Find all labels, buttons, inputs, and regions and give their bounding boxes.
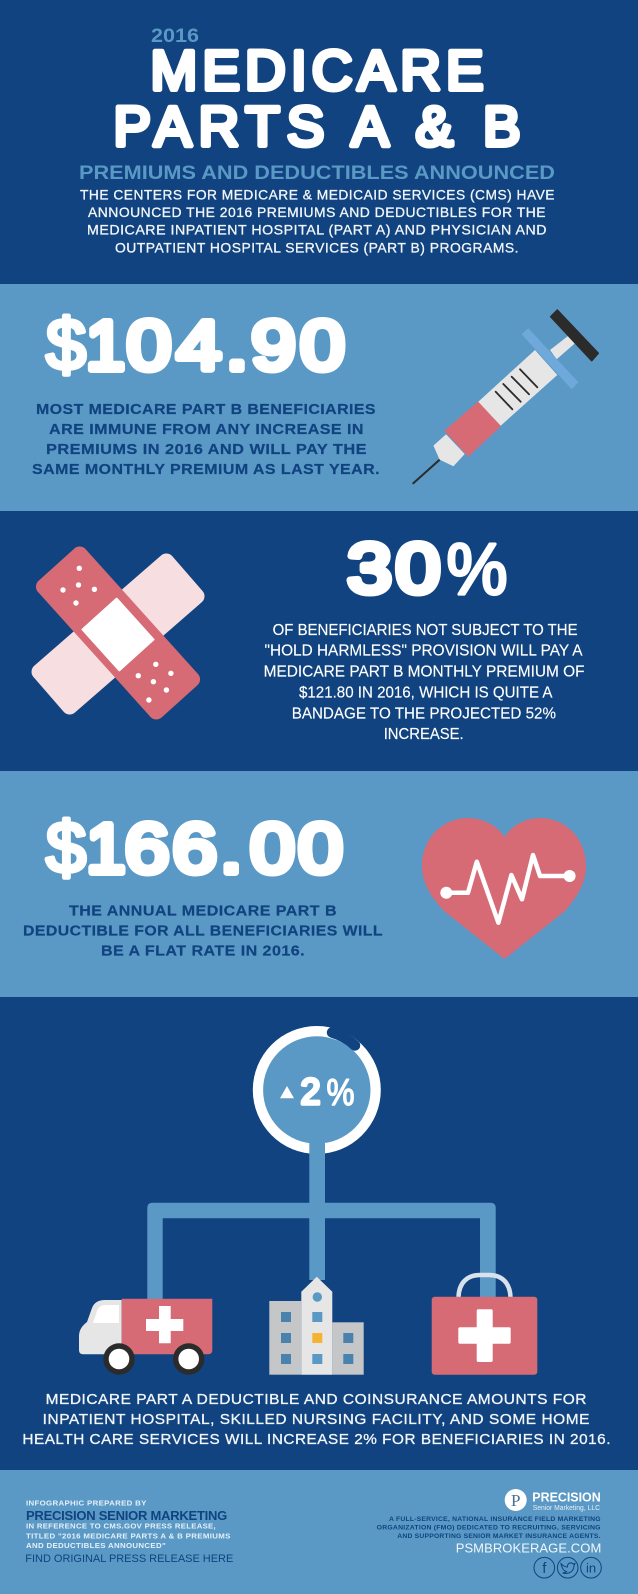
icon: syringe xyxy=(413,310,598,483)
thirty percent description: BANDAGE TO THE PROJECTED 52% xyxy=(292,705,556,722)
part A description xyxy=(22,1392,611,1448)
panel: header xyxy=(0,0,638,284)
part A description: INPATIENT HOSPITAL, SKILLED NURSING FACILITY, AND SOME HOME xyxy=(43,1412,590,1428)
stat: 30%: % xyxy=(446,530,508,610)
credits xyxy=(25,1499,233,1565)
intro text xyxy=(80,186,555,256)
stat: 2% xyxy=(300,1071,354,1113)
credits: FIND ORIGINAL PRESS RELEASE HERE xyxy=(25,1553,233,1565)
icon: heart with pulse xyxy=(422,818,586,959)
social icons xyxy=(534,1557,601,1578)
stat: $166.00: 1 xyxy=(86,810,125,888)
year label: 2016 xyxy=(151,26,199,47)
premium description xyxy=(32,402,380,478)
deductible description: THE ANNUAL MEDICARE PART B xyxy=(69,904,337,920)
logo: P xyxy=(511,1491,520,1510)
logo: Senior Marketing, LLC xyxy=(533,1503,601,1512)
credits: IN REFERENCE TO CMS.GOV PRESS RELEASE, xyxy=(26,1522,216,1531)
gauge: 2 percent ring xyxy=(253,1026,381,1203)
part A description: MEDICARE PART A DEDUCTIBLE AND COINSURANCE AMOUNTS FOR xyxy=(46,1392,587,1408)
premium description: PREMIUMS IN 2016 AND WILL PAY THE xyxy=(46,442,367,458)
intro text: OUTPATIENT HOSPITAL SERVICES (PART B) PROGRAMS. xyxy=(115,240,519,256)
social icons: in xyxy=(586,1560,596,1576)
stat: $104.90: 04.90 xyxy=(127,306,345,384)
credits: TITLED "2016 MEDICARE PARTS A & B PREMIUMS xyxy=(26,1532,231,1541)
thirty percent description: MEDICARE PART B MONTHLY PREMIUM OF xyxy=(264,664,585,681)
connector lines xyxy=(147,1203,496,1299)
icon: medical kit xyxy=(432,1275,537,1375)
company description xyxy=(377,1516,601,1540)
stat: 30%: 30 xyxy=(347,529,440,607)
stat: 2%: 2 xyxy=(300,1071,320,1112)
thirty percent description: OF BENEFICIARIES NOT SUBJECT TO THE xyxy=(273,622,578,639)
stat: 30% xyxy=(347,529,508,610)
credits: AND DEDUCTIBLES ANNOUNCED" xyxy=(26,1541,166,1550)
thirty percent description: INCREASE. xyxy=(384,726,464,743)
credits: PRECISION SENIOR MARKETING xyxy=(26,1508,227,1523)
deductible description: DEDUCTIBLE FOR ALL BENEFICIARIES WILL xyxy=(23,924,383,940)
deductible description xyxy=(23,904,383,960)
premium description: SAME MONTHLY PREMIUM AS LAST YEAR. xyxy=(32,462,380,478)
company description: A FULL-SERVICE, NATIONAL INSURANCE FIELD MARKETING xyxy=(389,1516,601,1523)
thirty percent description: $121.80 IN 2016, WHICH IS QUITE A xyxy=(299,685,553,702)
deductible description: BE A FLAT RATE IN 2016. xyxy=(101,944,305,960)
title xyxy=(114,38,520,158)
stat: $166.00: $ xyxy=(46,808,86,888)
panel: deductible xyxy=(0,771,638,997)
subtitle: PREMIUMS AND DEDUCTIBLES ANNOUNCED xyxy=(79,163,555,184)
premium description: MOST MEDICARE PART B BENEFICIARIES xyxy=(36,402,376,418)
part A description: HEALTH CARE SERVICES WILL INCREASE 2% FOR BENEFICIARIES IN 2016. xyxy=(22,1432,611,1448)
icon: ambulance xyxy=(79,1299,212,1375)
panel: footer xyxy=(0,1470,638,1594)
stat: 2%: % xyxy=(326,1072,354,1113)
intro text: MEDICARE INPATIENT HOSPITAL (PART A) AND PHYSICIAN AND xyxy=(87,222,547,238)
intro text: ANNOUNCED THE 2016 PREMIUMS AND DEDUCTIBLES FOR THE xyxy=(88,204,546,220)
stat: $166.00: 66.00 xyxy=(125,809,343,887)
icon: bandage xyxy=(28,543,208,723)
premium description: ARE IMMUNE FROM ANY INCREASE IN xyxy=(49,422,364,438)
thirty percent description xyxy=(264,622,585,743)
company description: AND SUPPORTING SENIOR MARKET INSURANCE AGENTS. xyxy=(397,1533,601,1540)
panel: thirty percent xyxy=(0,511,638,771)
logo xyxy=(505,1489,601,1512)
stat: $104.90: 1 xyxy=(86,306,125,384)
credits: INFOGRAPHIC PREPARED BY xyxy=(26,1499,147,1508)
panel: part A increase xyxy=(0,997,638,1470)
icon: hospital xyxy=(269,1277,364,1375)
social icons: f xyxy=(542,1560,547,1577)
website: PSMBROKERAGE.COM xyxy=(456,1540,601,1555)
panel: premium xyxy=(0,284,638,511)
icon: up triangle xyxy=(280,1086,294,1098)
intro text: THE CENTERS FOR MEDICARE & MEDICAID SERVICES (CMS) HAVE xyxy=(80,186,555,202)
company description: ORGANIZATION (FMO) DEDICATED TO RECRUITING, SERVICING xyxy=(377,1524,601,1531)
title: PARTS A & B xyxy=(114,94,520,158)
stat: $104.90: $ xyxy=(46,306,86,386)
title: MEDICARE xyxy=(150,38,484,102)
logo: PRECISION xyxy=(532,1491,601,1505)
thirty percent description: "HOLD HARMLESS" PROVISION WILL PAY A xyxy=(264,643,583,660)
